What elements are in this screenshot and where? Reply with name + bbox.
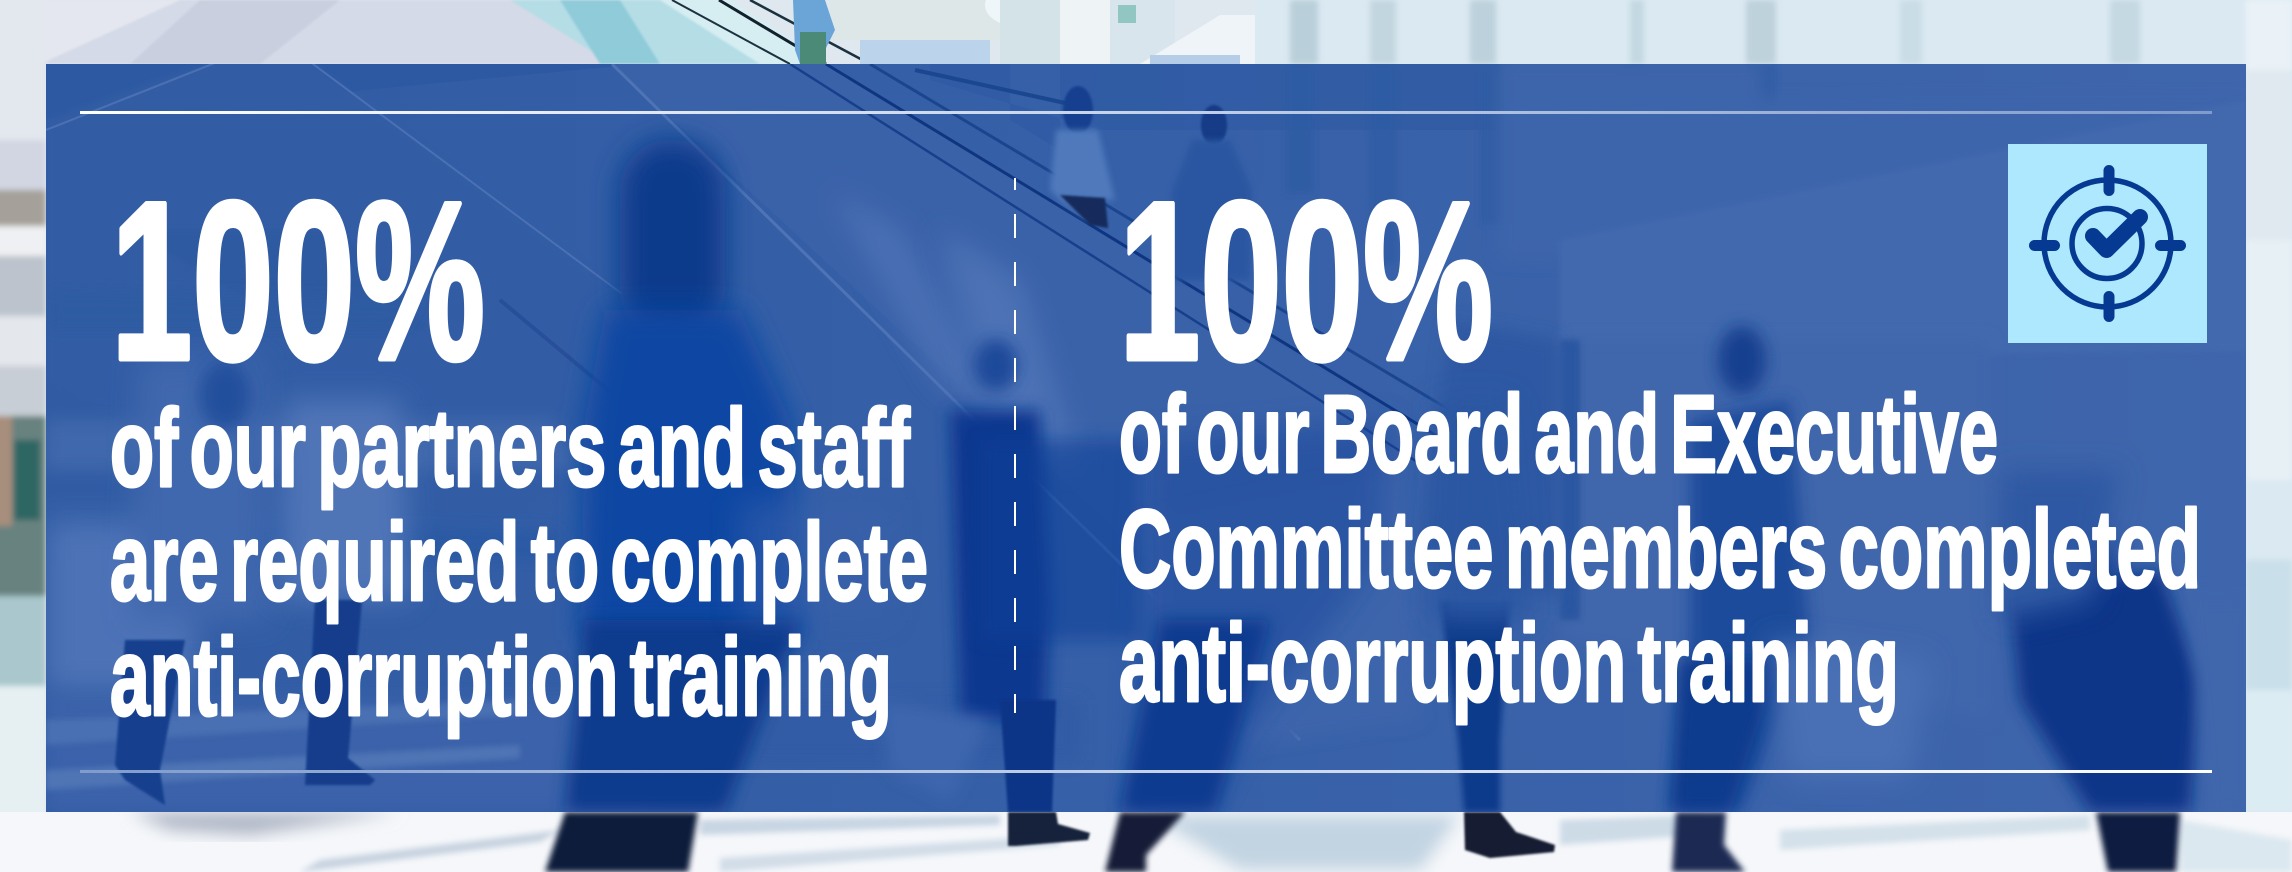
left description: [110, 387, 928, 739]
icon: target with check mark: [2008, 144, 2207, 343]
right description: anti-corruption training: [1119, 602, 1899, 725]
bottom rule: [80, 770, 2212, 773]
person: right center walkers: [1138, 420, 1390, 750]
right description: [1119, 373, 2201, 725]
person: far right walker: [2086, 540, 2121, 586]
escalator: [614, 64, 640, 66]
left description: of our partners and staff: [110, 387, 910, 510]
person: foreground blurred: [620, 140, 725, 340]
left architecture: [46, 64, 640, 120]
floor: [0, 812, 2292, 872]
person: center walker: [974, 339, 1018, 391]
left stat block: [110, 154, 928, 739]
background columns: [1310, 67, 1773, 262]
left description: are required to complete: [110, 501, 928, 624]
dashed divider: [1014, 178, 1016, 713]
left description: anti-corruption training: [110, 616, 892, 739]
top rule: [80, 111, 2212, 114]
person: left walker 1: [130, 360, 270, 620]
person: left walker 2: [280, 400, 410, 600]
right stat block: [1119, 154, 2201, 725]
glow behind text block: [1036, 434, 1144, 645]
escalator riders: [1063, 86, 1093, 134]
right stat: 100%: 100%: [1119, 154, 1493, 407]
floor reflections: [52, 706, 482, 806]
legs below panel: [545, 812, 698, 872]
left stat: 100%: 100%: [111, 154, 485, 407]
